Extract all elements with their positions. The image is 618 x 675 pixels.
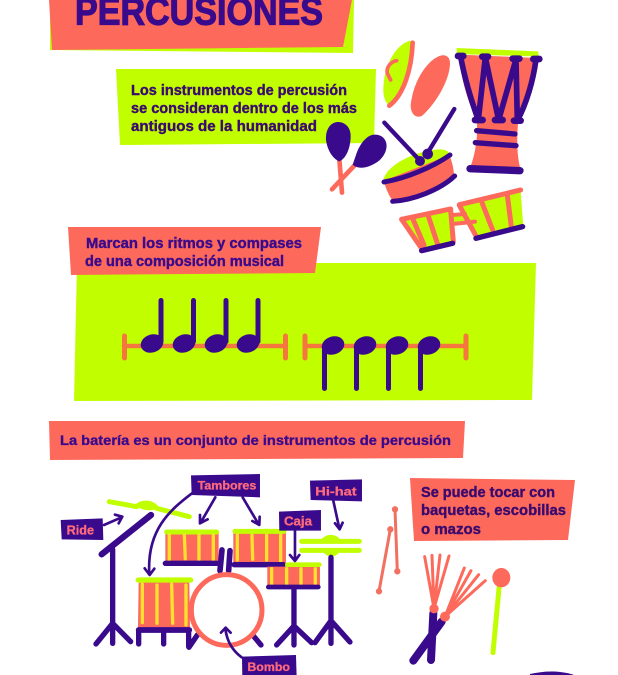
label: Caja: Caja	[284, 515, 313, 529]
icon: maracas	[326, 122, 387, 193]
label: Ride: Ride	[67, 524, 94, 538]
label: Caja	[279, 510, 321, 531]
icon: cropped purple shape	[530, 672, 573, 675]
intro text block: antiguos de la humanidad	[131, 118, 317, 135]
callout: how to play: Se puede tocar con	[421, 484, 555, 501]
icon: tom mounts	[220, 550, 230, 571]
icon: floor tom	[138, 580, 261, 647]
diagram: drum kit	[61, 474, 362, 675]
icon: snare drum with sticks	[383, 109, 455, 201]
icon: brushes	[413, 555, 485, 661]
icon: cymbal coral	[411, 55, 450, 117]
label: Hi-hat	[310, 479, 362, 501]
intro text block	[131, 82, 357, 135]
icon: bass drum	[191, 575, 262, 645]
icon: bongos	[402, 190, 523, 251]
icon: hi-hat	[302, 535, 359, 643]
icon: drumsticks	[377, 508, 399, 593]
icon: ride cymbal and stand	[96, 502, 189, 644]
title banner	[49, 0, 354, 53]
illustration: percussion instruments	[326, 41, 539, 251]
heading: rhythm: Marcan los ritmos y compases	[86, 235, 302, 252]
icon: cymbal	[383, 41, 413, 106]
callout: how to play: o mazos	[421, 521, 481, 538]
label: Tambores	[191, 474, 260, 497]
chart: staff with upward notes	[124, 298, 286, 358]
panel: rhythm	[68, 227, 536, 401]
label: Bombo: Bombo	[247, 660, 290, 674]
intro text block: Los instrumentos de percusión	[131, 82, 347, 99]
illustration: sticks, brushes and mallet	[377, 508, 573, 675]
chart: staff with downward notes	[305, 333, 466, 391]
label: Hi-hat: Hi-hat	[315, 484, 357, 498]
panel: intro text	[116, 69, 376, 145]
icon: snare	[267, 565, 320, 645]
heading: drum kit: La batería es un conjunto de instrumentos de percusión	[60, 432, 451, 448]
label: Ride	[61, 518, 103, 540]
heading: rhythm	[68, 227, 321, 275]
icon: mallet	[492, 568, 510, 653]
label: Tambores: Tambores	[198, 478, 256, 492]
label: Bombo	[242, 655, 297, 675]
heading: drum kit	[49, 421, 465, 460]
intro text block: se consideran dentro de los más	[131, 100, 357, 117]
heading: rhythm: de una composición musical	[85, 253, 284, 270]
arrows	[104, 493, 343, 657]
callout: how to play: baquetas, escobillas	[421, 502, 566, 519]
icon: left tom	[165, 532, 219, 563]
callout: how to play	[410, 478, 575, 541]
icon: right tom	[233, 531, 286, 565]
icon: conga drum	[457, 48, 539, 171]
